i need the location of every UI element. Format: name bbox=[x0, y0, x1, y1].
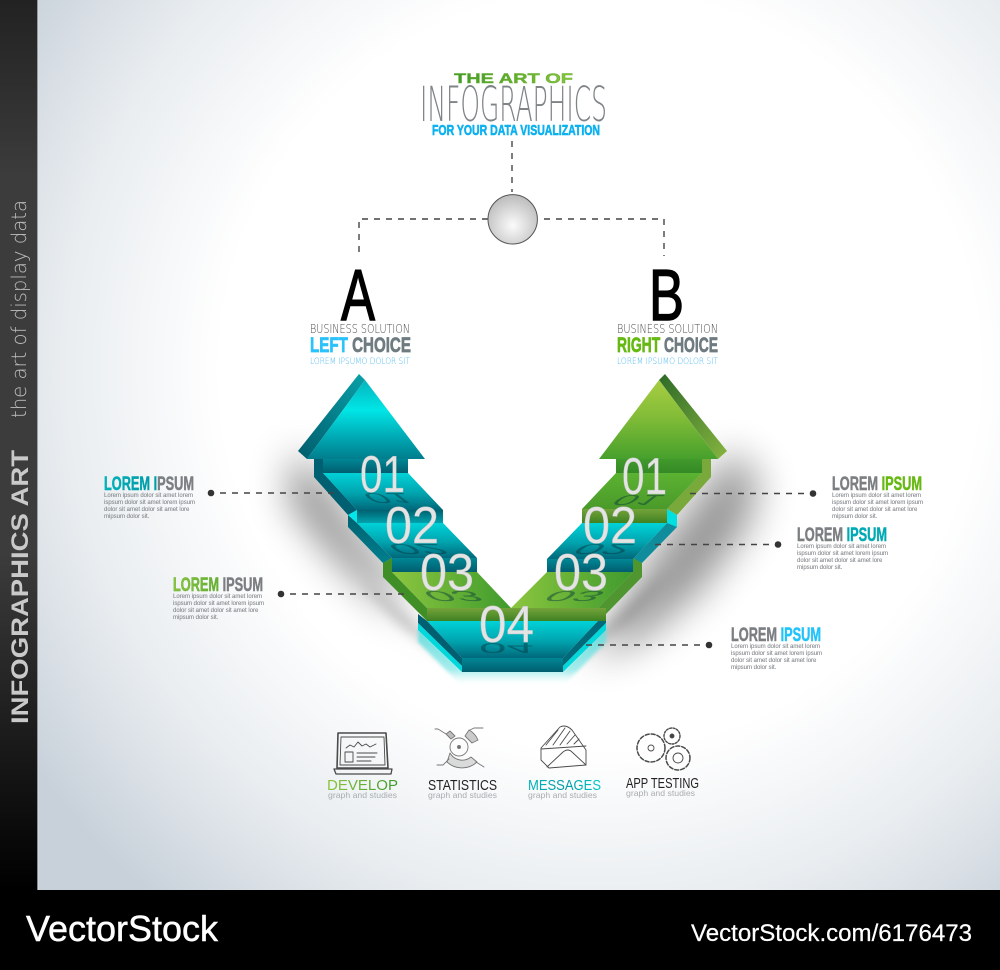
feature: develop bbox=[327, 733, 398, 800]
footer url: VectorStock.com/6176473 bbox=[691, 920, 972, 947]
callout body: ispsum dolor sit amet lorem ipsum bbox=[832, 500, 923, 506]
callout body: ispsum dolor sit amet lorem ipsum bbox=[104, 500, 195, 506]
footer bar bbox=[0, 890, 1000, 970]
callout body: ispsum dolor sit amet lorem ipsum bbox=[173, 601, 264, 607]
step 02 surface bbox=[348, 510, 477, 563]
callout body: Lorem ipsum dolor sit amet lorem bbox=[832, 493, 921, 499]
glow under step 04 bbox=[418, 628, 606, 684]
statistics caption: graph and studies bbox=[428, 790, 497, 800]
right arrow: green bbox=[511, 374, 727, 614]
callout: left bottom bbox=[173, 575, 406, 621]
left arrow: cyan bbox=[298, 374, 511, 621]
arrow drop shadows bbox=[290, 450, 760, 672]
left arrow head bbox=[298, 374, 425, 459]
callout body: dolor sit amet dolor sit amet lore bbox=[731, 658, 817, 664]
callout body: ispsum dolor sit amet lorem ipsum bbox=[731, 651, 822, 657]
leader line bbox=[655, 541, 781, 548]
caption A: LOREM IPSUMO DOLOR SIT bbox=[310, 357, 410, 367]
left arrow stem bbox=[314, 459, 408, 515]
callout body: Lorem ipsum dolor sit amet lorem bbox=[104, 493, 193, 499]
letter A: A bbox=[341, 256, 375, 336]
number reflections: 01 bbox=[605, 492, 671, 508]
title line: infographics: INFOGRAPHICS bbox=[420, 77, 607, 133]
step 03 front strip bbox=[427, 608, 606, 621]
callout body: dolor sit amet dolor sit amet lore bbox=[797, 558, 883, 564]
number reflections: 03 bbox=[416, 588, 491, 604]
connector lines from title to A and B bbox=[359, 141, 664, 256]
feature: statistics bbox=[428, 728, 497, 800]
leader line bbox=[208, 490, 336, 496]
left 02: 02 bbox=[385, 497, 439, 555]
feature: app testing bbox=[626, 728, 699, 798]
right arrow stem bbox=[616, 459, 711, 515]
left 03: 03 bbox=[420, 544, 474, 602]
leader line bbox=[278, 591, 406, 597]
step 03 surface bbox=[383, 558, 511, 621]
callout body: Lorem ipsum dolor sit amet lorem bbox=[173, 594, 262, 600]
number reflections: 01 bbox=[356, 490, 422, 506]
callout body: dolor sit amet dolor sit amet lore bbox=[104, 507, 190, 513]
left 01: 01 bbox=[360, 446, 405, 504]
step 04 top surface bbox=[427, 621, 598, 658]
right choice label: RIGHT CHOICE bbox=[617, 334, 718, 357]
callout: right bottom bbox=[586, 625, 822, 671]
right 03: 03 bbox=[554, 544, 608, 602]
right step 02 surface bbox=[547, 509, 677, 563]
right arrow head bbox=[599, 374, 727, 459]
center 04: 04 bbox=[479, 596, 534, 654]
app testing caption: graph and studies bbox=[626, 788, 695, 798]
right step 01 surface bbox=[582, 473, 702, 509]
number reflections: 03 bbox=[537, 588, 612, 604]
callout body: mipsum dolor sit. bbox=[173, 615, 219, 621]
letter B: B bbox=[649, 256, 684, 336]
heading: choice A bbox=[310, 256, 411, 367]
step 04 left and right faces bbox=[418, 614, 606, 672]
number reflections: 02 bbox=[381, 541, 456, 557]
callout body: mipsum dolor sit. bbox=[104, 514, 150, 520]
title line: subtitle: FOR YOUR DATA VISUALIZATION bbox=[432, 123, 600, 139]
messages label: MESSAGES bbox=[528, 777, 601, 794]
callout body: Lorem ipsum dolor sit amet lorem bbox=[797, 544, 886, 550]
number reflections: 04 bbox=[479, 640, 534, 656]
callout body: dolor sit amet dolor sit amet lore bbox=[173, 608, 259, 614]
step 04 front strip bbox=[462, 658, 563, 672]
callout heading: LOREM IPSUM bbox=[797, 525, 887, 546]
statistics label: STATISTICS bbox=[428, 777, 497, 794]
callout: right middle bbox=[655, 525, 888, 571]
callout body: Lorem ipsum dolor sit amet lorem bbox=[731, 644, 820, 650]
sidebar title: INFOGRAPHICS ART bbox=[7, 450, 34, 724]
title block bbox=[420, 70, 607, 139]
callout body: mipsum dolor sit. bbox=[797, 565, 843, 571]
callout heading: LOREM IPSUM bbox=[832, 474, 922, 495]
messages caption: graph and studies bbox=[528, 790, 597, 800]
callout heading: LOREM IPSUM bbox=[731, 625, 821, 646]
develop caption: graph and studies bbox=[328, 790, 397, 800]
leader line bbox=[690, 490, 816, 497]
business solution label A: BUSINESS SOLUTION bbox=[310, 321, 410, 336]
callout body: dolor sit amet dolor sit amet lore bbox=[832, 507, 918, 513]
sidebar tagline: the art of display data bbox=[7, 200, 31, 418]
callout body: mipsum dolor sit. bbox=[731, 665, 777, 671]
business solution label B: BUSINESS SOLUTION bbox=[617, 321, 718, 336]
central sphere bbox=[488, 195, 537, 244]
right 02: 02 bbox=[583, 497, 637, 555]
callout: right top bbox=[690, 474, 923, 520]
icon: laptop bbox=[334, 733, 392, 774]
callout body: ispsum dolor sit amet lorem ipsum bbox=[797, 551, 888, 557]
icon: radial chart sketch bbox=[435, 728, 484, 768]
feature: messages bbox=[528, 726, 601, 800]
callout: left top bbox=[104, 474, 336, 520]
bottom step 04 bbox=[418, 608, 606, 684]
caption B: LOREM IPSUMO DOLOR SIT bbox=[617, 357, 718, 367]
title line: the art of: THE ART OF bbox=[454, 70, 574, 86]
number reflections: 02 bbox=[566, 541, 641, 557]
icon: envelope bbox=[541, 726, 586, 768]
step 01 surface bbox=[323, 473, 443, 510]
left choice label: LEFT CHOICE bbox=[310, 334, 411, 357]
footer brand left: VectorStock bbox=[26, 908, 219, 949]
step numbers bbox=[356, 446, 671, 656]
icon: gears bbox=[637, 728, 690, 770]
heading: choice B bbox=[617, 256, 718, 367]
leader line bbox=[586, 642, 712, 648]
left sidebar bbox=[0, 0, 38, 890]
right step 03 surface bbox=[511, 558, 642, 614]
app testing label: APP TESTING bbox=[626, 775, 699, 792]
callout heading: LOREM IPSUM bbox=[173, 575, 263, 596]
number reflections bbox=[356, 490, 671, 656]
develop label: DEVELOP bbox=[327, 777, 398, 794]
callout heading: LOREM IPSUM bbox=[104, 474, 194, 495]
callout body: mipsum dolor sit. bbox=[832, 514, 878, 520]
right 01: 01 bbox=[622, 448, 667, 506]
